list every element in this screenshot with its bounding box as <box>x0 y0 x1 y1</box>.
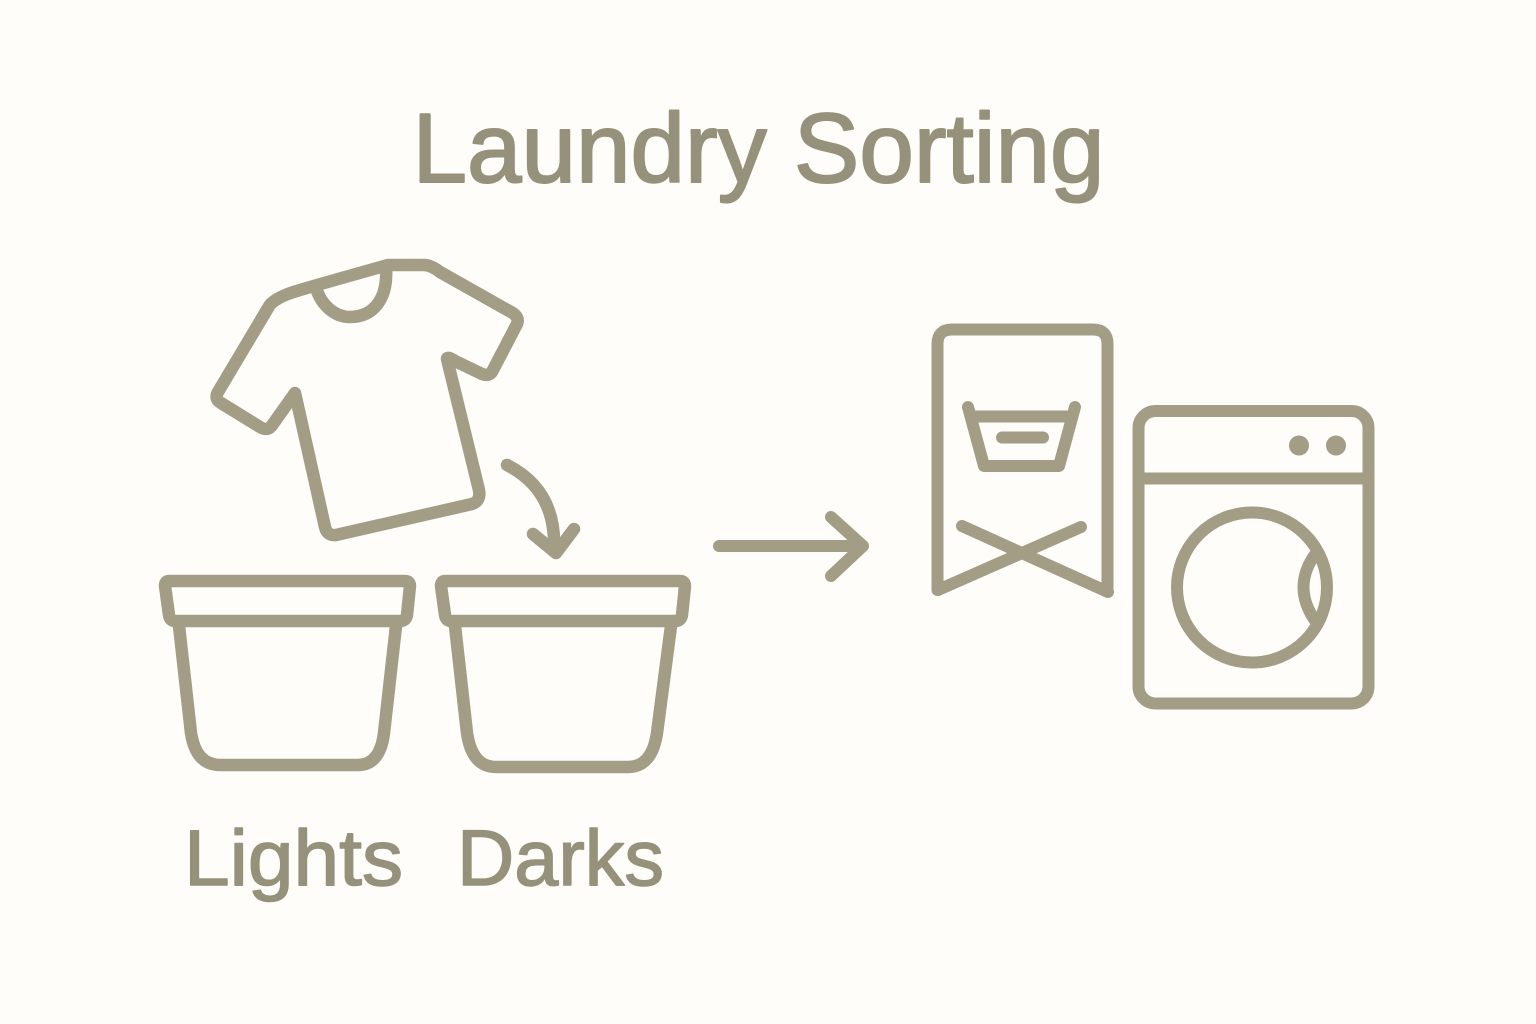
icon: darks basket <box>441 581 685 767</box>
icon: wash tub symbol <box>968 407 1075 466</box>
icon: lights basket <box>165 581 410 765</box>
title: Laundry Sorting <box>412 93 1104 203</box>
icon: t-shirt <box>217 265 518 535</box>
label: lights: Lights <box>184 813 403 902</box>
icon: care label <box>938 330 1108 592</box>
arrow: to washing <box>719 517 863 576</box>
arrow: shirt into darks <box>507 465 574 553</box>
label: darks: Darks <box>457 813 664 902</box>
icon: washing machine <box>1138 411 1368 704</box>
